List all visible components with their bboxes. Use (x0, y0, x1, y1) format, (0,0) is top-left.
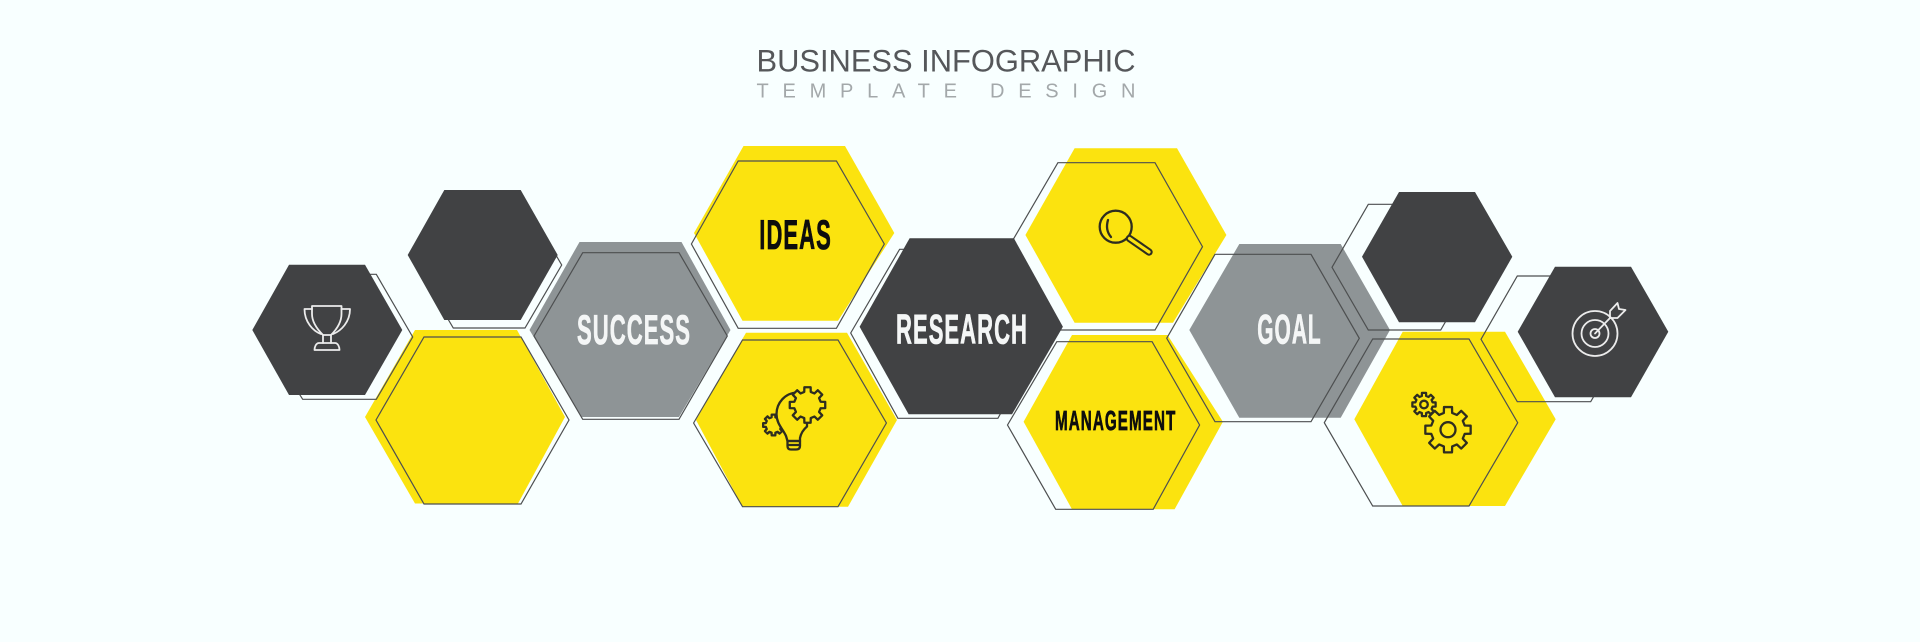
panel: blank yellow hexagon (365, 330, 569, 504)
icon: magnifying glass (1100, 211, 1149, 252)
title (756, 42, 1136, 102)
panel: success (530, 242, 730, 419)
panel: trophy (252, 265, 413, 399)
panel: ideas (691, 146, 894, 328)
icon: bulb and gears (763, 387, 825, 450)
label: management: MANAGEMENT (1055, 405, 1176, 436)
title: BUSINESS INFOGRAPHIC (756, 42, 1136, 78)
panel: dark blank hexagon right (1332, 192, 1512, 330)
panel: management (1008, 335, 1223, 509)
panel: goal (1167, 244, 1390, 422)
icon: target with arrow (1572, 303, 1626, 356)
subtitle: TEMPLATE DESIGN (756, 80, 1136, 102)
panel: magnifier (1009, 148, 1226, 330)
label: success: SUCCESS (577, 306, 691, 353)
label: ideas: IDEAS (759, 211, 832, 258)
icon: two gears (1412, 393, 1471, 452)
panel: bulb with gears (694, 333, 897, 507)
panel: dark blank hexagon left (408, 190, 562, 328)
icon: trophy (304, 306, 350, 350)
panel: gears (1324, 332, 1556, 506)
panel: research (851, 238, 1063, 418)
label: research: RESEARCH (896, 306, 1028, 352)
panel: target (1481, 267, 1668, 402)
panel: goal: GOAL (1257, 306, 1322, 352)
